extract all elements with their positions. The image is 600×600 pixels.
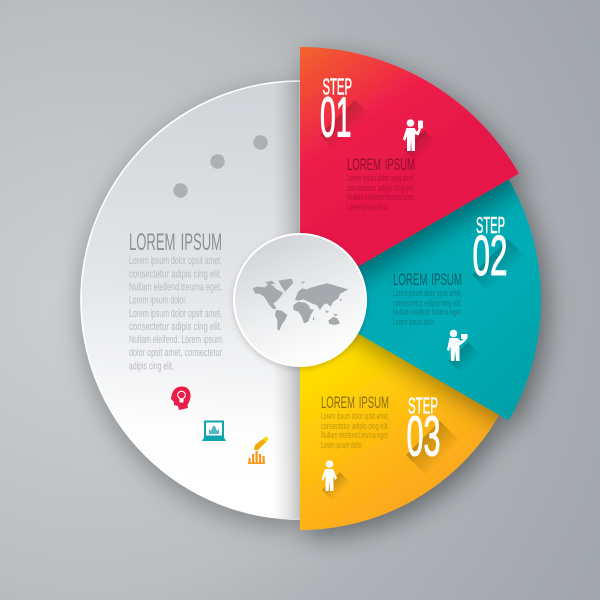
world map [253,279,348,331]
left body text: Nullam eleifend. Lorem ipsum [129,334,222,346]
step 2 label: STEP [476,212,505,238]
step 3 body text: Nullam eleifend treuma eget. [321,430,389,440]
step 1 label: 01 [320,86,352,150]
step 1 label [320,74,352,150]
step 2 heading: LOREM IPSUM [393,270,462,289]
step 2 body text: Lorem ipsum dolor. [393,317,436,327]
step 1 heading: LOREM IPSUM [347,155,415,174]
step 3 body text: Lorem ipsum dolor opsit amet, [321,411,389,421]
panel: step 1 red wedge [300,47,519,300]
left body text: Lorem ipsum dolor. [129,294,187,306]
step 3 body text: consectetur adipis cing elit. [321,421,389,431]
step 3 label [406,392,440,468]
panel: step 3 yellow wedge [300,300,499,530]
step 1 body text: consectetur adipis cing elit. [347,183,415,193]
panel: step 1 red wedge: STEP [322,74,352,100]
step 3 label: 03 [406,404,440,468]
step 1 body text: Nullam eleifend treuma eget. [347,192,415,202]
step 2 label [472,212,508,288]
panel: step 2 teal wedge [300,180,544,420]
step 1 label shadow [320,100,387,167]
step 2 label: 02 [472,224,508,288]
icon: hand over bar chart [248,437,268,464]
left body text: consectetur adipis cing elit. [129,268,222,280]
step 2 body text: Nullam eleifend treuma eget. [393,307,462,317]
step 3 body text [321,411,389,450]
step 1 body text: Lorem ipsum dolor. [347,202,389,212]
left body text [129,255,222,372]
left heading: LOREM IPSUM [129,229,222,256]
left body text: dolor opsit amet, consectetur [129,347,222,359]
step 2 body text [393,288,462,327]
left body text: Lorem ipsum dolor opsit amet, [129,308,222,320]
step 2 body text: Lorem ipsum dolor opsit amet, [393,288,462,298]
icon: person with tablet [447,330,468,361]
icon: head with light bulb [171,386,191,410]
icon: laptop with chart [202,422,226,441]
step 1 body text [347,173,415,212]
step 1 body text: Lorem ipsum dolor opsit amet, [347,173,415,183]
step 3 body text: Lorem ipsum dolor. [321,440,363,450]
icon: person on phone [322,460,337,491]
centre hub circle [234,234,366,366]
step 1 person shadow [404,130,446,172]
panel: left semicircle [81,81,300,519]
left body text: adipis cing elit. [129,360,174,372]
left body text: consectetur adipis cing elit. [129,321,222,333]
step 3 person shadow [322,472,360,510]
icon: person with phone [403,119,423,151]
step 2 label shadow [472,239,544,311]
step 3 heading: LOREM IPSUM [321,393,389,412]
step 2 person shadow [449,342,490,383]
progress dots [173,135,268,198]
left body text: Nullam eleifend treuma eget. [129,282,222,294]
left body text: Lorem ipsum dolor opsit amet, [129,255,222,267]
step 3 label: STEP [408,392,438,418]
step 2 body text: consectetur adipis cing elit. [393,298,462,308]
step 3 label shadow [406,421,478,493]
